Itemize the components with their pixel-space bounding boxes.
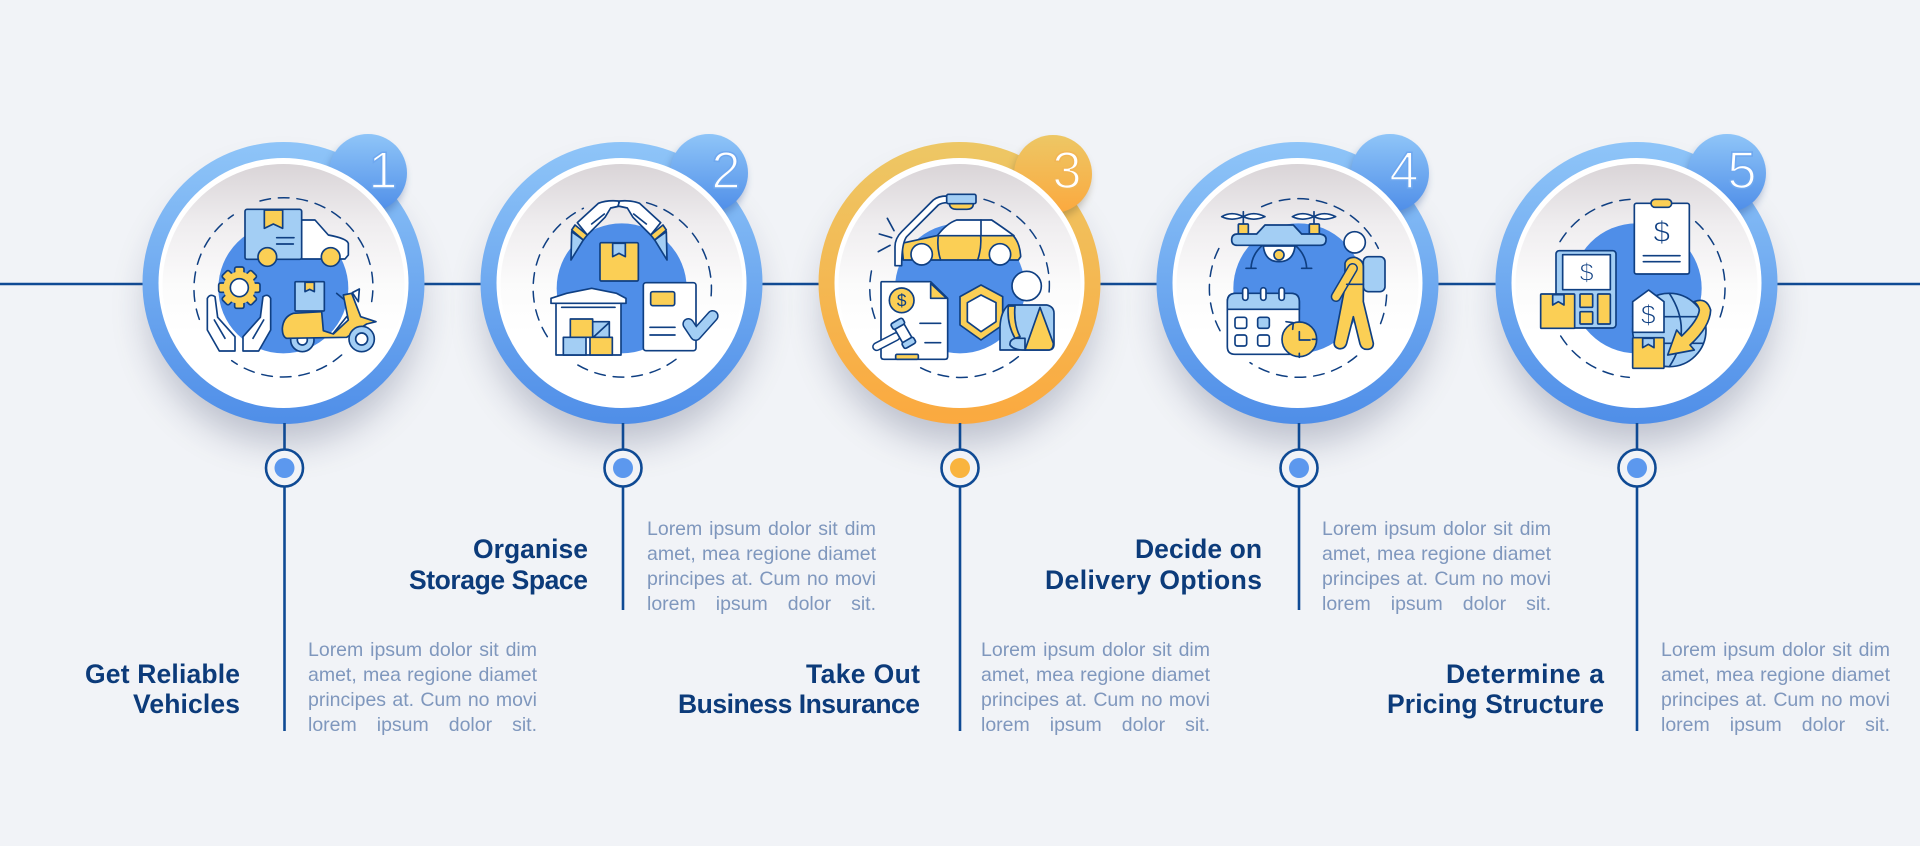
text block: step 4 description: lorem ipsum dolor sit.: [1322, 593, 1551, 615]
connector and node for step 4: [1280, 423, 1318, 610]
heading: Decide on Delivery Options: Decide on: [1135, 534, 1262, 564]
text block: step 5 description: amet, mea regione diamet: [1661, 664, 1890, 686]
step 2: circle with icon: [480, 134, 762, 444]
step 2 number badge: [670, 134, 748, 212]
heading: Organise Storage Space: [409, 534, 588, 595]
step 3: circle with icon: [818, 135, 1100, 444]
text block: step 1 description: amet, mea regione diamet: [308, 664, 537, 686]
heading: Determine a Pricing Structure: [1387, 659, 1604, 719]
step 5: circle with icon: [1496, 134, 1778, 444]
connector and node for step 2: [604, 423, 642, 610]
text block: step 1 description: principes at. Cum no movi: [308, 689, 537, 711]
heading: Decide on Delivery Options: Delivery Options: [1045, 565, 1262, 595]
icon: hands over box, warehouse and checked document: [533, 201, 713, 377]
text block: step 3 description: Lorem ipsum dolor sit dim: [981, 639, 1210, 661]
icon: car under lamp, legal document, shield and injured person: $: [897, 291, 907, 311]
text block: step 3 description: lorem ipsum dolor sit.: [981, 714, 1210, 736]
heading: Take Out Business Insurance: [678, 659, 920, 719]
step 5 number badge: 5: [1728, 142, 1756, 200]
text block: step 3 description: amet, mea regione diamet: [981, 664, 1210, 686]
step 3 number badge: 3: [1053, 142, 1081, 200]
text block: step 5 description: Lorem ipsum dolor sit dim: [1661, 639, 1890, 661]
text block: step 2 description: lorem ipsum dolor sit.: [647, 593, 876, 615]
step 4: circle with icon: [1156, 134, 1438, 444]
connector and node for step 5: [1618, 423, 1656, 731]
heading: Decide on Delivery Options: [1045, 534, 1262, 595]
text block: step 3 description: principes at. Cum no movi: [981, 689, 1210, 711]
icon: truck, gear, hands and scooter: [194, 198, 376, 377]
text block: step 1 description: Lorem ipsum dolor sit dim: [308, 639, 537, 661]
text block: step 1 description: lorem ipsum dolor sit.: [308, 714, 537, 736]
heading: Organise Storage Space: Storage Space: [409, 565, 588, 595]
text block: step 4 description: Lorem ipsum dolor sit dim: [1322, 518, 1551, 540]
text block: step 2 description: [647, 518, 876, 615]
icon: drone, calendar with clock and walking courier: [1209, 199, 1387, 377]
icon: calculator, price list, price tag and globe: $: [1641, 300, 1656, 330]
text block: step 4 description: amet, mea regione diamet: [1322, 543, 1551, 565]
step 2 number badge: 2: [712, 142, 740, 200]
text block: step 5 description: [1661, 639, 1890, 736]
text block: step 4 description: [1322, 518, 1551, 615]
step 1 number badge: 1: [369, 142, 397, 200]
heading: Determine a Pricing Structure: Pricing Structure: [1387, 689, 1604, 719]
step 5 number badge: [1688, 134, 1766, 212]
icon: calculator, price list, price tag and globe: $: [1653, 216, 1670, 249]
heading: Determine a Pricing Structure: Determine a: [1446, 659, 1604, 689]
step 3 number badge: [1014, 135, 1092, 213]
text block: step 1 description: [308, 639, 537, 736]
icon: calculator, price list, price tag and globe: [1541, 199, 1725, 377]
text block: step 2 description: Lorem ipsum dolor sit dim: [647, 518, 876, 540]
step 1 number badge: [329, 134, 407, 212]
heading: Get Reliable Vehicles: Vehicles: [133, 689, 240, 719]
text block: step 5 description: lorem ipsum dolor sit.: [1661, 714, 1890, 736]
text block: step 2 description: amet, mea regione diamet: [647, 543, 876, 565]
heading: Get Reliable Vehicles: Get Reliable: [85, 659, 240, 689]
text block: step 5 description: principes at. Cum no movi: [1661, 689, 1890, 711]
step 1: circle with icon: [142, 134, 424, 444]
step 4 number badge: 4: [1390, 142, 1418, 200]
heading: Organise Storage Space: Organise: [473, 534, 588, 564]
connector and node for step 1: [266, 423, 303, 731]
heading: Take Out Business Insurance: Business Insurance: [678, 689, 920, 719]
text block: step 3 description: [981, 639, 1210, 736]
icon: calculator, price list, price tag and globe: $: [1580, 259, 1594, 287]
icon: car under lamp, legal document, shield and injured person: [870, 194, 1054, 378]
heading: Get Reliable Vehicles: [85, 659, 240, 719]
text block: step 4 description: principes at. Cum no movi: [1322, 568, 1551, 590]
heading: Take Out Business Insurance: Take Out: [806, 659, 920, 689]
connector and node for step 3: [942, 423, 978, 731]
text block: step 2 description: principes at. Cum no movi: [647, 568, 876, 590]
step 4 number badge: [1351, 134, 1429, 212]
